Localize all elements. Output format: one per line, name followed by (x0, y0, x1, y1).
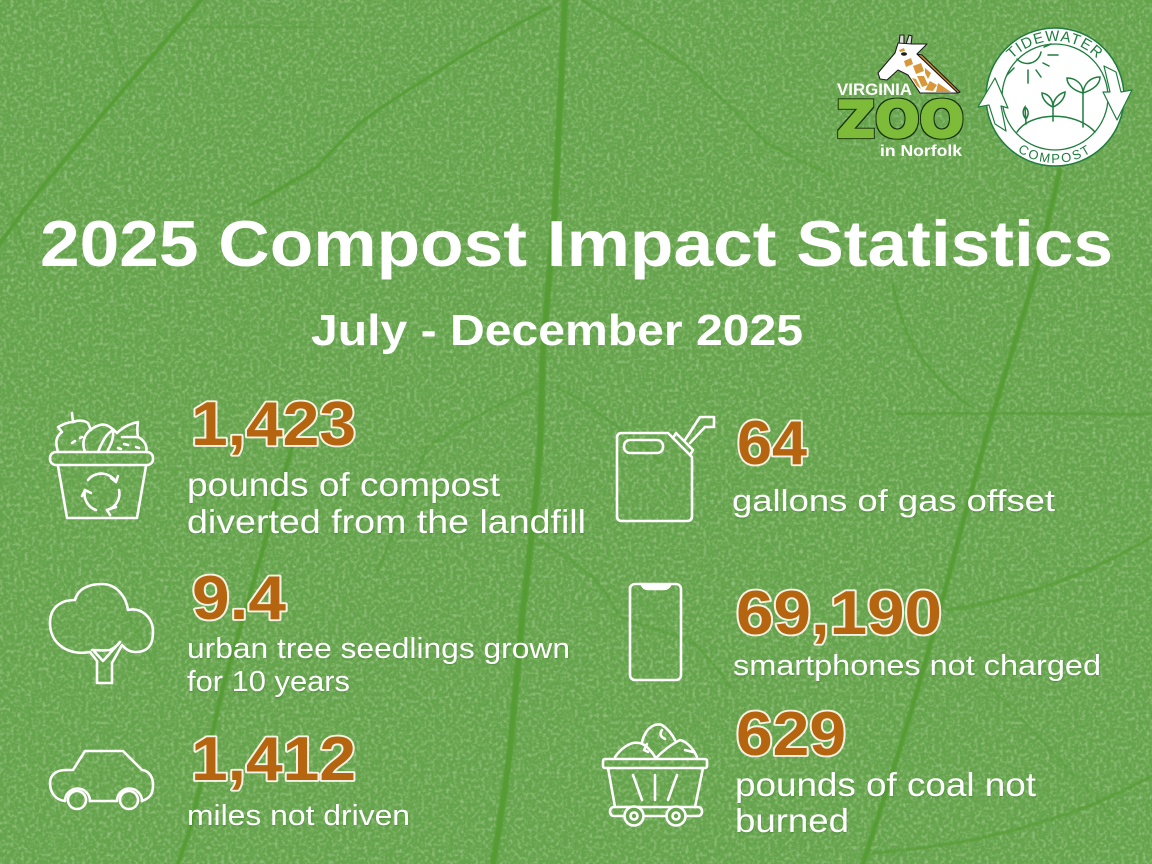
value: 64 (737, 409, 808, 478)
label (187, 466, 586, 540)
label: miles not driven (187, 800, 410, 832)
icon: gas can (617, 417, 714, 521)
sun and seedlings (1007, 44, 1100, 132)
logo: Virginia Zoo in Norfolk (837, 35, 964, 160)
value: 9.4 (192, 564, 287, 633)
label (735, 766, 1036, 839)
label: gallons of gas offset (732, 483, 1055, 518)
badge circle (986, 28, 1124, 166)
badge top text: TIDEWATER (1006, 30, 1102, 58)
stat: compost diverted (50, 390, 586, 540)
label: for 10 years (187, 666, 350, 698)
stat: gallons of gas (617, 409, 1055, 521)
icon: car (50, 751, 153, 809)
label: pounds of compost (187, 466, 500, 503)
label: diverted from the landfill (187, 503, 586, 540)
subtitle: July - December 2025 (311, 306, 803, 355)
label: smartphones not charged (733, 650, 1101, 682)
badge bottom text: COMPOST (1019, 144, 1088, 164)
stat: smartphones (630, 579, 1101, 682)
recycling arrows (978, 66, 1132, 131)
value: 69,190 (736, 579, 942, 648)
icon: smartphone (630, 584, 681, 680)
label: urban tree seedlings grown (187, 633, 570, 665)
label (187, 633, 570, 698)
wordmark in Norfolk: in Norfolk (880, 143, 962, 160)
icon: coal cart (603, 724, 707, 826)
logo: Tidewater Compost (978, 27, 1132, 167)
icon: compost bucket (50, 413, 153, 518)
label: pounds of coal not (735, 766, 1036, 803)
value: 1,412 (191, 725, 356, 794)
value: 1,423 (191, 390, 356, 459)
stat: tree seedlings (50, 564, 570, 698)
icon: tree (50, 584, 153, 683)
wordmark ZOO: ZOO (837, 91, 964, 149)
stat: coal (603, 700, 1036, 839)
giraffe illustration (878, 35, 960, 93)
stat: miles not driven (50, 725, 410, 832)
label: burned (735, 802, 849, 839)
value: 629 (736, 700, 846, 769)
title: 2025 Compost Impact Statistics (40, 207, 1113, 280)
wordmark VIRGINIA: VIRGINIA (837, 80, 912, 99)
